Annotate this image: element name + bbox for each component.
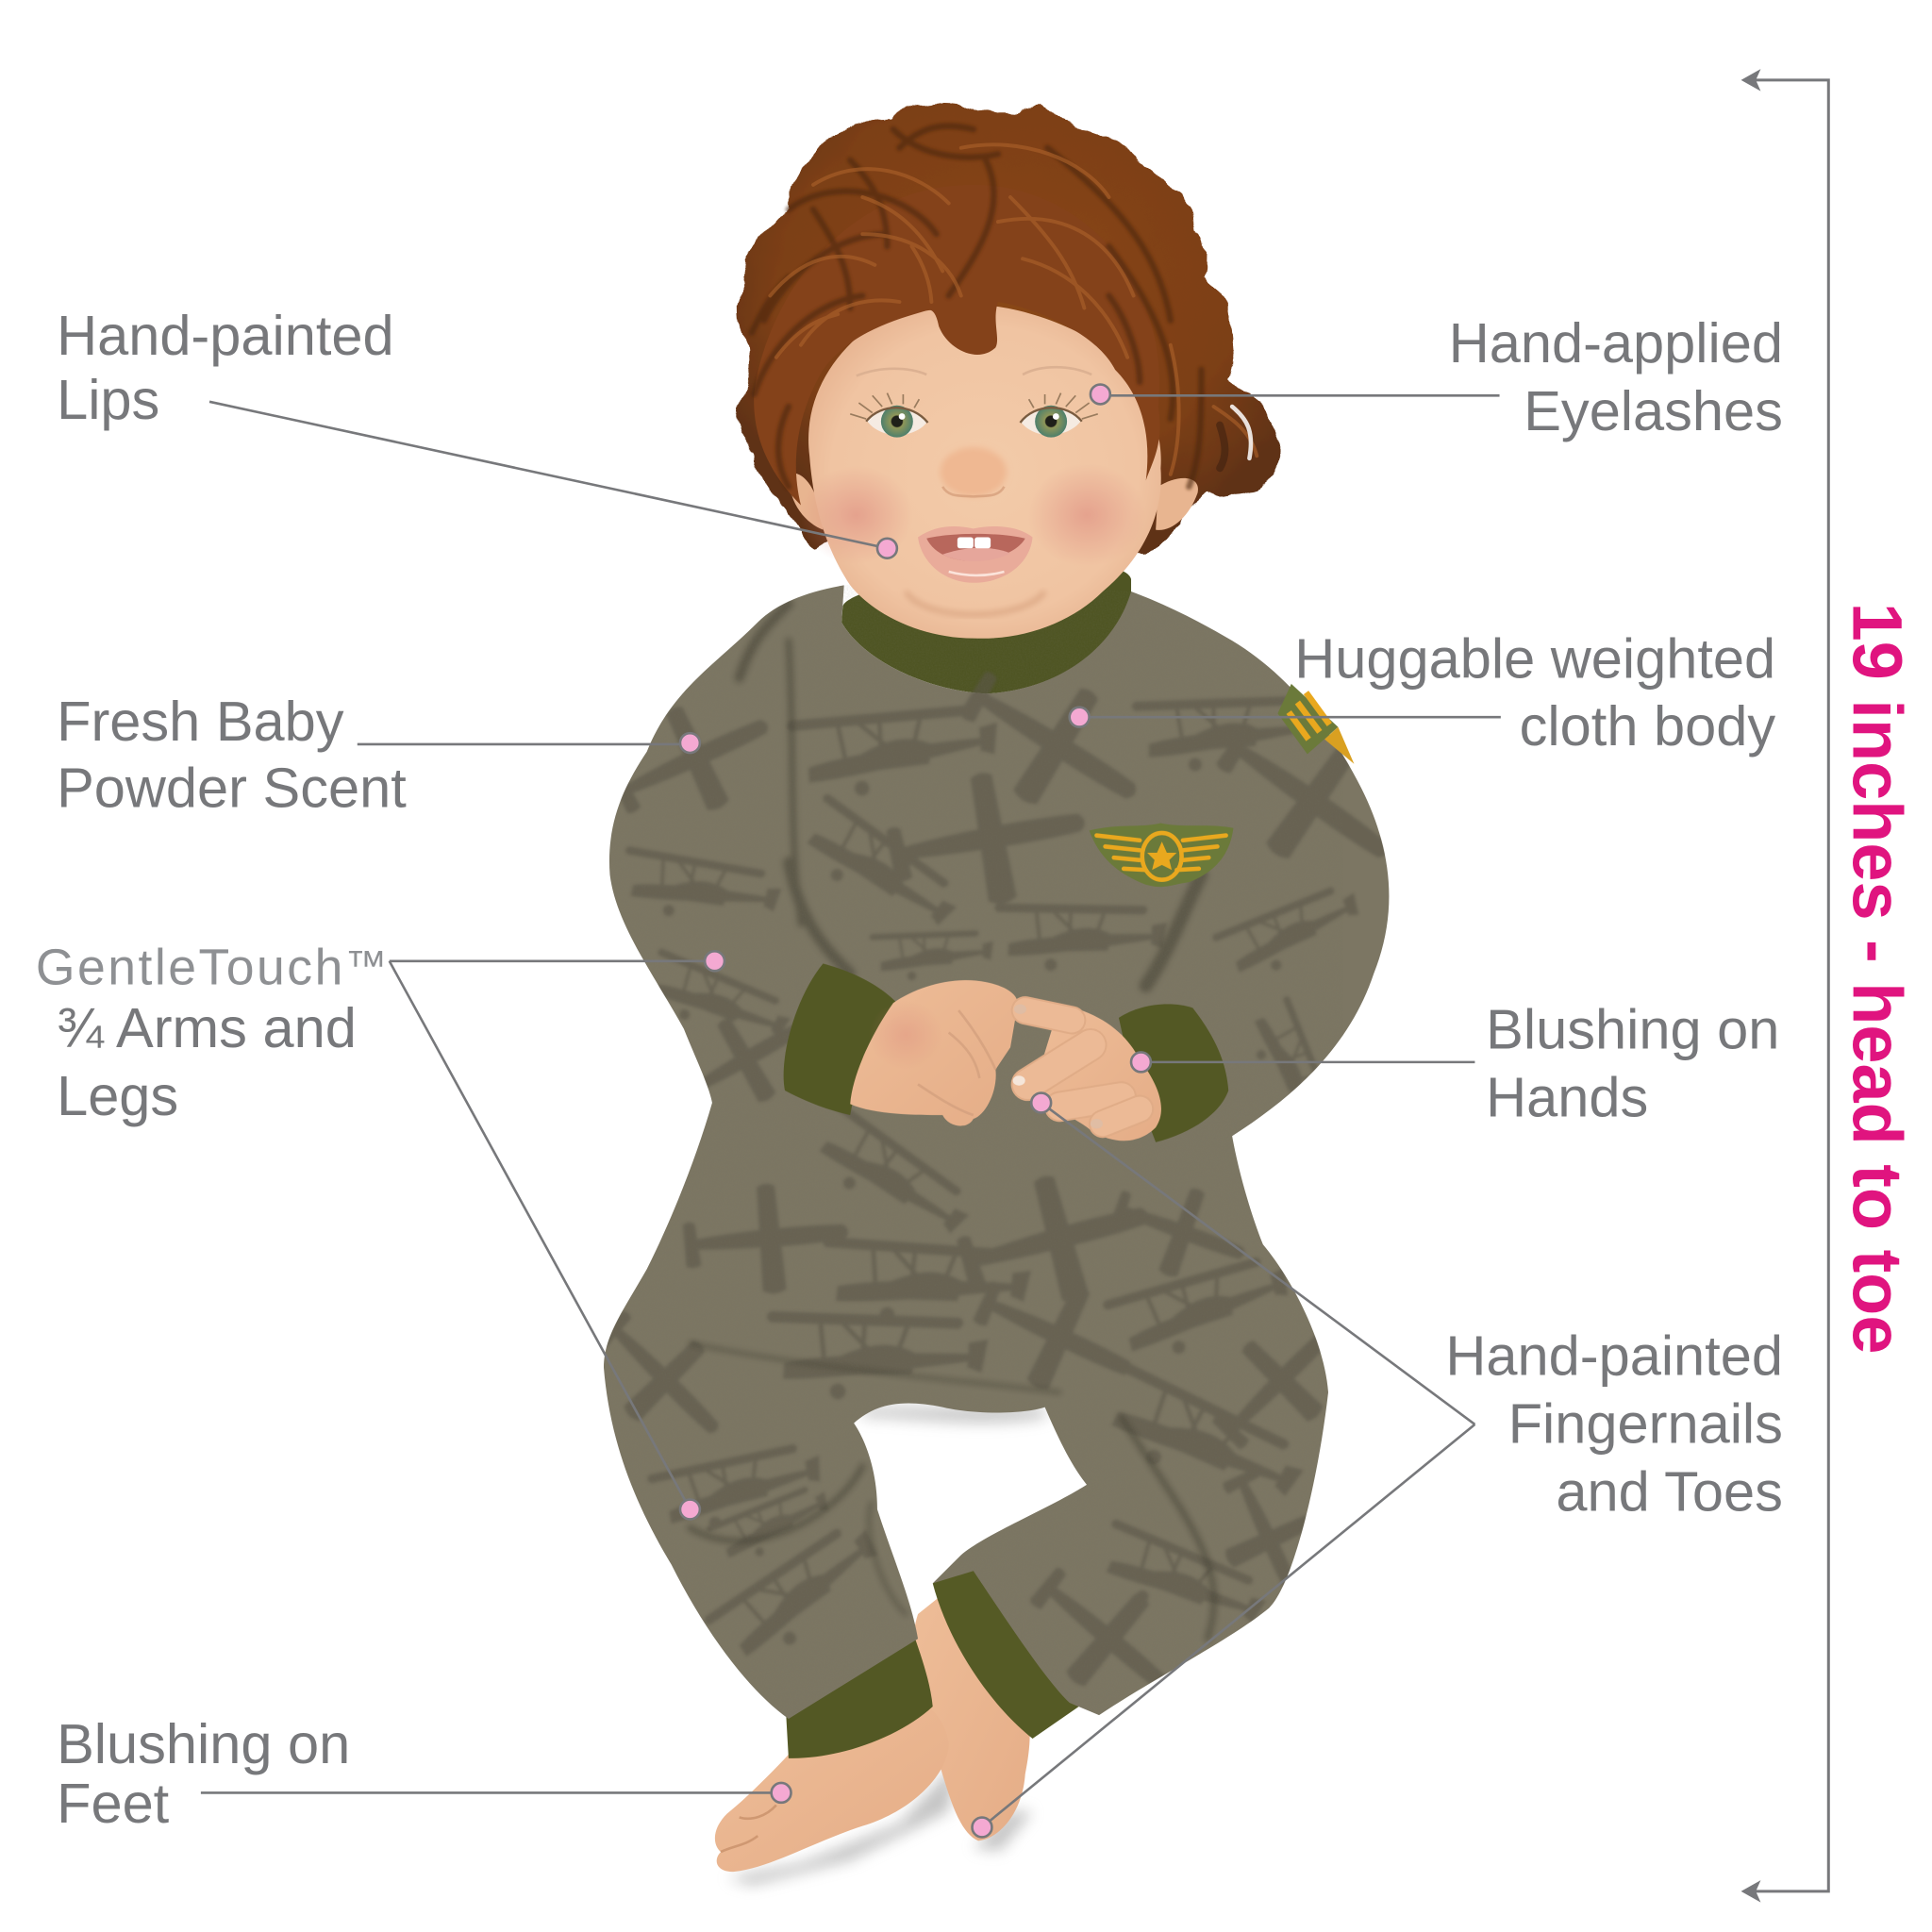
right callout leader lines bbox=[982, 395, 1501, 1827]
chin fold bbox=[906, 591, 1045, 614]
right leg cuff bbox=[933, 1562, 1084, 1739]
turtleneck collar bbox=[841, 563, 1131, 693]
label: hand-applied eyelashes: Hand-applied bbox=[1449, 311, 1783, 375]
chest wing badge bbox=[1090, 823, 1233, 887]
label: huggable weighted cloth body: cloth body bbox=[1520, 694, 1775, 758]
height label: 19 inches - head to toe bbox=[1838, 603, 1916, 1354]
ears bbox=[789, 474, 1198, 530]
label: arms and legs: ¾ Arms and bbox=[57, 996, 357, 1059]
left foot bbox=[715, 1703, 949, 1872]
hair back bbox=[739, 103, 1285, 557]
label: blushing on feet: Feet bbox=[57, 1772, 170, 1835]
height bracket with arrows bbox=[1741, 69, 1828, 1903]
left eye bbox=[850, 369, 928, 438]
left leg cuff bbox=[786, 1629, 933, 1758]
label: hand-painted lips: Hand-painted bbox=[57, 304, 394, 367]
label: blushing on hands: Hands bbox=[1486, 1065, 1648, 1128]
label: blushing on feet: Blushing on bbox=[57, 1712, 350, 1775]
right eye bbox=[1020, 367, 1098, 438]
label: hand-painted fingernails and toes: and Toes bbox=[1556, 1459, 1783, 1523]
face bbox=[800, 305, 1161, 639]
label: hand-painted fingernails and toes: Hand-painted bbox=[1445, 1324, 1783, 1388]
romper body bbox=[604, 585, 1389, 1719]
label: hand-painted fingernails and toes: Fingernails bbox=[1508, 1391, 1783, 1455]
label: GentleTouch trademark: GentleTouch bbox=[36, 941, 345, 996]
label: GentleTouch trademark: ™ bbox=[345, 942, 387, 989]
right sleeve cuff bbox=[1119, 1004, 1228, 1142]
callout marker dots bbox=[680, 385, 1151, 1837]
open smile with teeth bbox=[918, 526, 1033, 583]
cheek blush bbox=[800, 466, 913, 564]
left sleeve cuff bbox=[784, 963, 896, 1115]
floor shadow under feet bbox=[727, 1407, 1047, 1885]
airplane print and fabric folds bbox=[606, 585, 1385, 1687]
label: fresh baby powder scent: Fresh Baby bbox=[57, 690, 344, 753]
label: blushing on hands: Blushing on bbox=[1486, 998, 1779, 1061]
label: huggable weighted cloth body: Huggable weighted bbox=[1294, 626, 1775, 690]
label: hand-painted lips: Lips bbox=[57, 368, 159, 431]
left callout leader lines bbox=[201, 402, 887, 1792]
hair front and fringe bbox=[752, 126, 1257, 506]
nose bbox=[941, 447, 1007, 496]
label: arms and legs: Legs bbox=[57, 1064, 178, 1127]
right foot bbox=[913, 1590, 1030, 1840]
left hand bbox=[850, 980, 1018, 1125]
sleeve stripe patch bbox=[1277, 684, 1354, 764]
label: fresh baby powder scent: Powder Scent bbox=[57, 757, 407, 820]
right hand with painted nails bbox=[1013, 1004, 1161, 1141]
label: hand-applied eyelashes: Eyelashes bbox=[1524, 379, 1783, 442]
doll figure bbox=[574, 103, 1424, 1885]
